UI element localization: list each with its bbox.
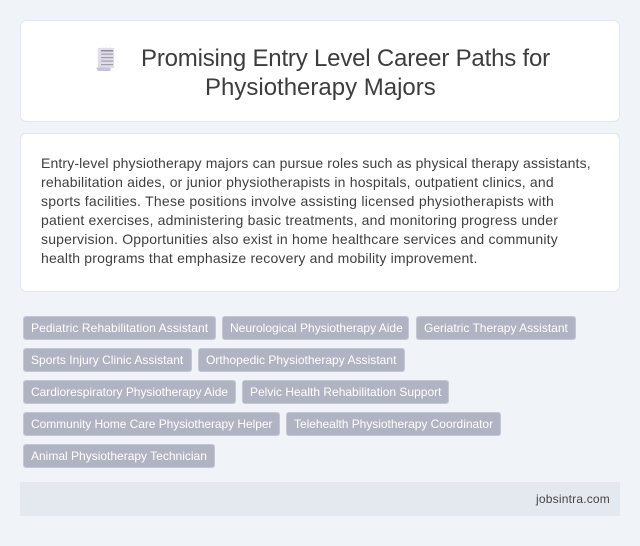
description text: patient exercises, administering basic treatments, and monitoring progress under (41, 212, 558, 228)
footer source text: jobsintra.com (536, 492, 610, 506)
tag (222, 316, 409, 340)
tag: Cardiorespiratory Physiotherapy Aide (31, 385, 228, 399)
tag: Pediatric Rehabilitation Assistant (31, 321, 208, 335)
description text: supervision. Opportunities also exist in home healthcare services and community (41, 231, 558, 247)
tag: Telehealth Physiotherapy Coordinator (294, 417, 493, 431)
tag: Pelvic Health Rehabilitation Support (250, 385, 441, 399)
icon: document scroll (96, 48, 114, 71)
tag: Animal Physiotherapy Technician (31, 449, 207, 463)
footer bar (20, 482, 620, 516)
tag (242, 380, 449, 404)
tag: Neurological Physiotherapy Aide (230, 321, 403, 335)
tag list (23, 316, 576, 468)
tag: Orthopedic Physiotherapy Assistant (206, 353, 396, 367)
description text: health programs that emphasize recovery and mobility improvement. (41, 250, 478, 266)
description text: rehabilitation aides, or junior physiotherapists in hospitals, outpatient clinics, and (41, 174, 554, 190)
tag (23, 444, 215, 468)
title line 2: Physiotherapy Majors (205, 74, 436, 101)
panel: description (20, 133, 620, 292)
tag: Sports Injury Clinic Assistant (31, 353, 183, 367)
description text: Entry-level physiotherapy majors can pursue roles such as physical therapy assistants, (41, 155, 591, 171)
title line 1: Promising Entry Level Career Paths for (141, 45, 550, 72)
tag (23, 380, 236, 404)
tag (416, 316, 576, 340)
panel: title card (20, 20, 620, 122)
tag (23, 412, 280, 436)
tag: Geriatric Therapy Assistant (424, 321, 568, 335)
tag (23, 316, 216, 340)
tag (23, 348, 192, 372)
description text: sports facilities. These positions involve assisting licensed physiotherapists with (41, 193, 554, 209)
tag: Community Home Care Physiotherapy Helper (31, 417, 272, 431)
tag (286, 412, 501, 436)
tag (198, 348, 405, 372)
description text (41, 155, 591, 266)
